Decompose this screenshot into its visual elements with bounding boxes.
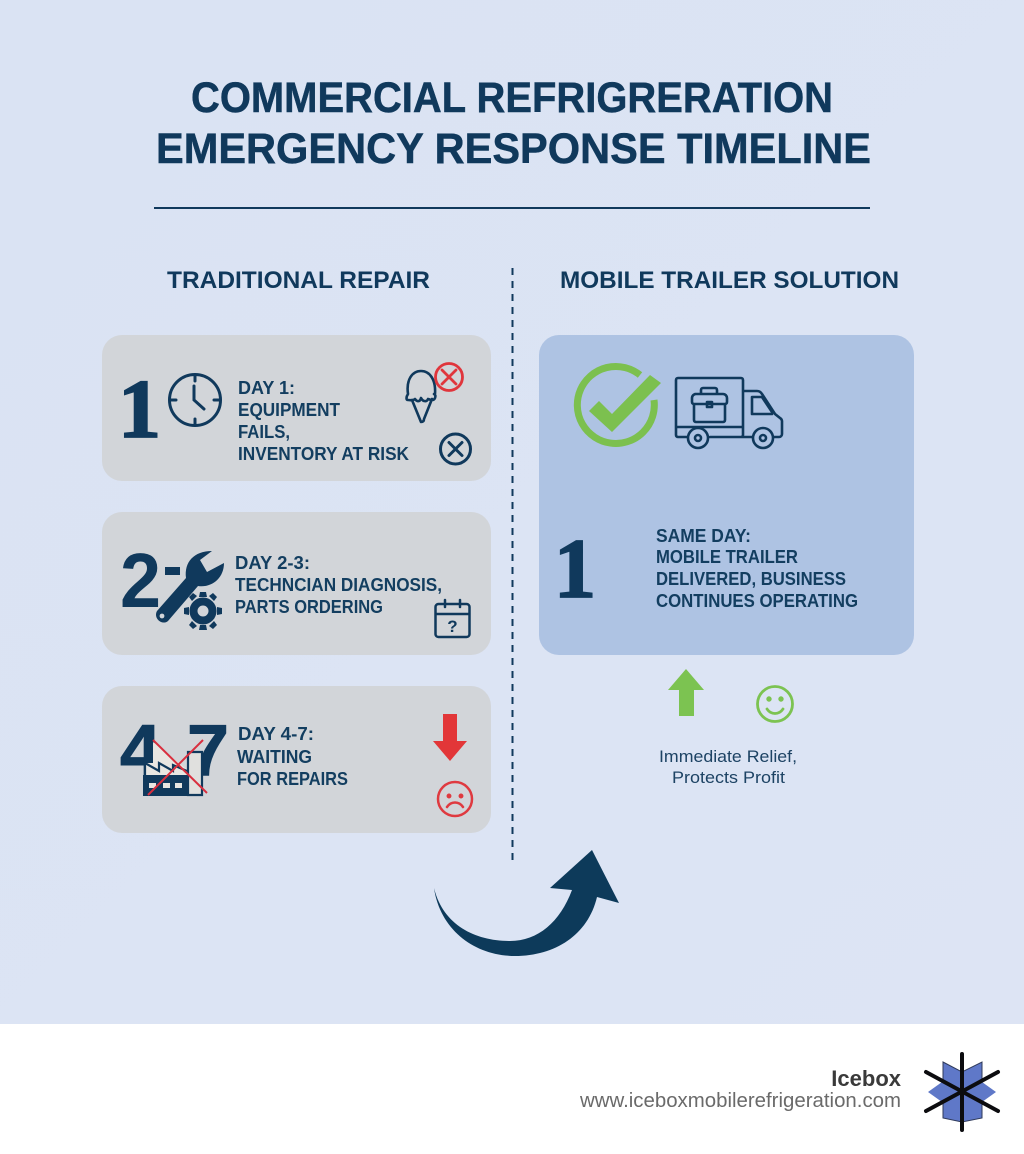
icon: green check circle bbox=[577, 366, 661, 443]
text: day 4-7: WAITING bbox=[237, 746, 312, 767]
panel: day 1 bbox=[102, 335, 491, 481]
number 1: 1 bbox=[554, 522, 596, 616]
icon: calendar question: ? bbox=[447, 617, 458, 636]
text: day 1: INVENTORY AT RISK bbox=[238, 443, 410, 464]
text: day 1 bbox=[238, 377, 410, 464]
website url: www.iceboxmobilerefrigeration.com bbox=[579, 1090, 901, 1112]
icon: ice cream with red cross bbox=[406, 364, 462, 422]
text: day 1: FAILS, bbox=[238, 421, 290, 442]
icon: crossed factory bbox=[143, 740, 207, 795]
icon: cross circle bbox=[440, 434, 470, 464]
title: COMMERCIAL REFRIGRERATION bbox=[191, 74, 833, 122]
text: immediate relief: Protects Profit bbox=[672, 768, 785, 787]
number 4-7 bbox=[120, 711, 229, 791]
arrow: curved transition arrow bbox=[434, 850, 619, 956]
heading: traditional repair: TRADITIONAL REPAIR bbox=[167, 267, 430, 294]
text: same day bbox=[656, 525, 858, 611]
heading: mobile trailer solution: MOBILE TRAILER SOLUTION bbox=[560, 267, 899, 294]
text: day 4-7 bbox=[237, 723, 348, 789]
icon: delivery truck with toolbox bbox=[676, 378, 782, 448]
footer bbox=[0, 1024, 1024, 1154]
title: EMERGENCY RESPONSE TIMELINE bbox=[156, 125, 871, 173]
text: immediate relief bbox=[659, 747, 797, 787]
icon: wrench and gear bbox=[156, 551, 224, 630]
number 2-: 2 bbox=[120, 538, 161, 624]
text: day 2-3 bbox=[235, 552, 442, 617]
text: day 2-3: TECHNCIAN DIAGNOSIS, bbox=[235, 574, 442, 595]
text: day 2-3: DAY 2-3: bbox=[235, 552, 310, 573]
panel: same day solution bbox=[539, 335, 914, 655]
icon: smile face bbox=[758, 686, 792, 722]
text: immediate relief: Immediate Relief, bbox=[659, 747, 797, 766]
icon: red down arrow bbox=[433, 714, 467, 761]
number 1: 1 bbox=[118, 363, 161, 456]
text: day 4-7: DAY 4-7: bbox=[238, 723, 314, 744]
text: same day: SAME DAY: bbox=[656, 525, 751, 546]
brand name: Icebox bbox=[831, 1066, 902, 1091]
panel: day 2-3 bbox=[102, 512, 491, 655]
number 4-7: 7 bbox=[187, 711, 229, 791]
number 4-7: 4 bbox=[120, 711, 161, 791]
text: same day: DELIVERED, BUSINESS bbox=[656, 568, 846, 589]
icon: calendar question bbox=[436, 600, 470, 637]
panel: day 4-7 bbox=[102, 686, 491, 833]
text: same day: CONTINUES OPERATING bbox=[656, 590, 858, 611]
text: day 1: EQUIPMENT bbox=[238, 399, 341, 420]
icon: green up arrow bbox=[668, 669, 704, 716]
icon: sad face bbox=[438, 782, 472, 816]
icon: snowflake logo bbox=[926, 1054, 998, 1130]
icon: clock bbox=[170, 374, 220, 426]
text: day 1: DAY 1: bbox=[238, 377, 295, 398]
text: day 4-7: FOR REPAIRS bbox=[237, 768, 348, 789]
text: same day: MOBILE TRAILER bbox=[656, 546, 798, 567]
title bbox=[156, 74, 871, 173]
text: day 2-3: PARTS ORDERING bbox=[235, 596, 383, 617]
